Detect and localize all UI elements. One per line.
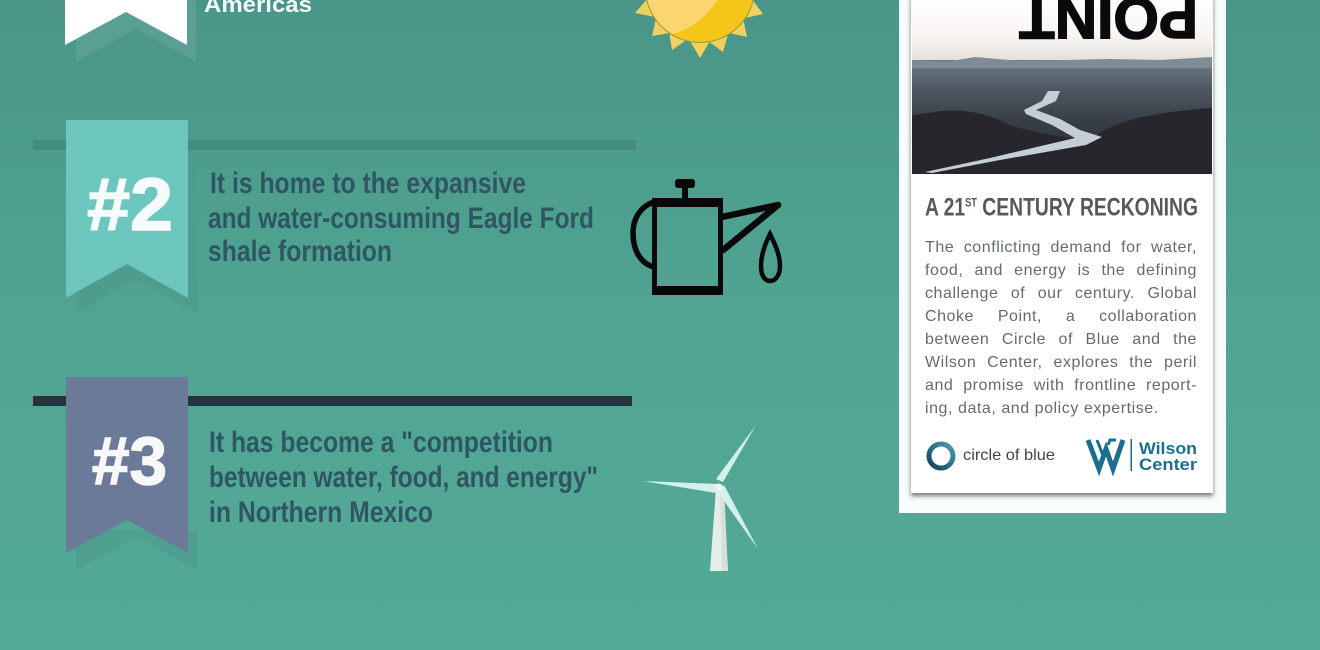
logo: Wilson Center: Wilson — [1139, 439, 1197, 458]
logo: circle of blue — [929, 444, 1055, 468]
text: book description — [925, 239, 1197, 417]
text: reason 3: between water, food, and energy" — [209, 461, 598, 494]
text: book description: between Circle of Blue and the — [925, 331, 1197, 348]
icon: wind turbine — [643, 425, 758, 571]
book cover photo — [912, 57, 1212, 174]
text: book description: food, and energy is the defining — [925, 262, 1197, 279]
heading: CENTURY RECKONING — [977, 194, 1198, 222]
logo: Wilson Center: Center — [1139, 455, 1197, 474]
text: reason 2 — [208, 167, 594, 268]
ribbon #2 divider line — [33, 140, 636, 150]
ribbon #2 — [66, 120, 197, 313]
heading: A 21 — [925, 194, 977, 222]
text: book description: ing, data, and policy expertise. — [925, 400, 1159, 417]
panel: book promo — [899, 0, 1226, 513]
text: book description: challenge of our century. Global — [925, 285, 1197, 302]
text: reason 3 — [209, 426, 598, 529]
text: reason 2: It is home to the expansive — [210, 167, 526, 200]
text: reason 2: and water-consuming Eagle Ford — [208, 202, 594, 235]
icon: oil can — [633, 179, 780, 295]
ribbon #3 — [66, 377, 197, 570]
logo: Wilson Center — [1088, 439, 1197, 474]
ribbon #1 — [65, 0, 196, 62]
text: book description: Wilson Center, explores the peril — [925, 354, 1197, 371]
text: reason 3: It has become a "competition — [209, 426, 553, 459]
text: book description: The conflicting demand for water, — [925, 239, 1197, 256]
icon: sun — [635, 0, 763, 58]
text: reason 2: shale formation — [208, 235, 392, 268]
book cover sky — [912, 0, 1212, 60]
ribbon #3 divider line — [33, 396, 632, 406]
logo: circle of blue: circle of blue — [963, 447, 1055, 464]
text: book description: Choke Point, a collaboration — [925, 308, 1197, 325]
heading: ST — [965, 196, 977, 210]
ribbon label: #2 — [87, 163, 173, 246]
text: book description: and promise with frontline report- — [925, 377, 1197, 394]
text: reason 3: in Northern Mexico — [209, 496, 433, 529]
ribbon label: #3 — [92, 423, 167, 499]
